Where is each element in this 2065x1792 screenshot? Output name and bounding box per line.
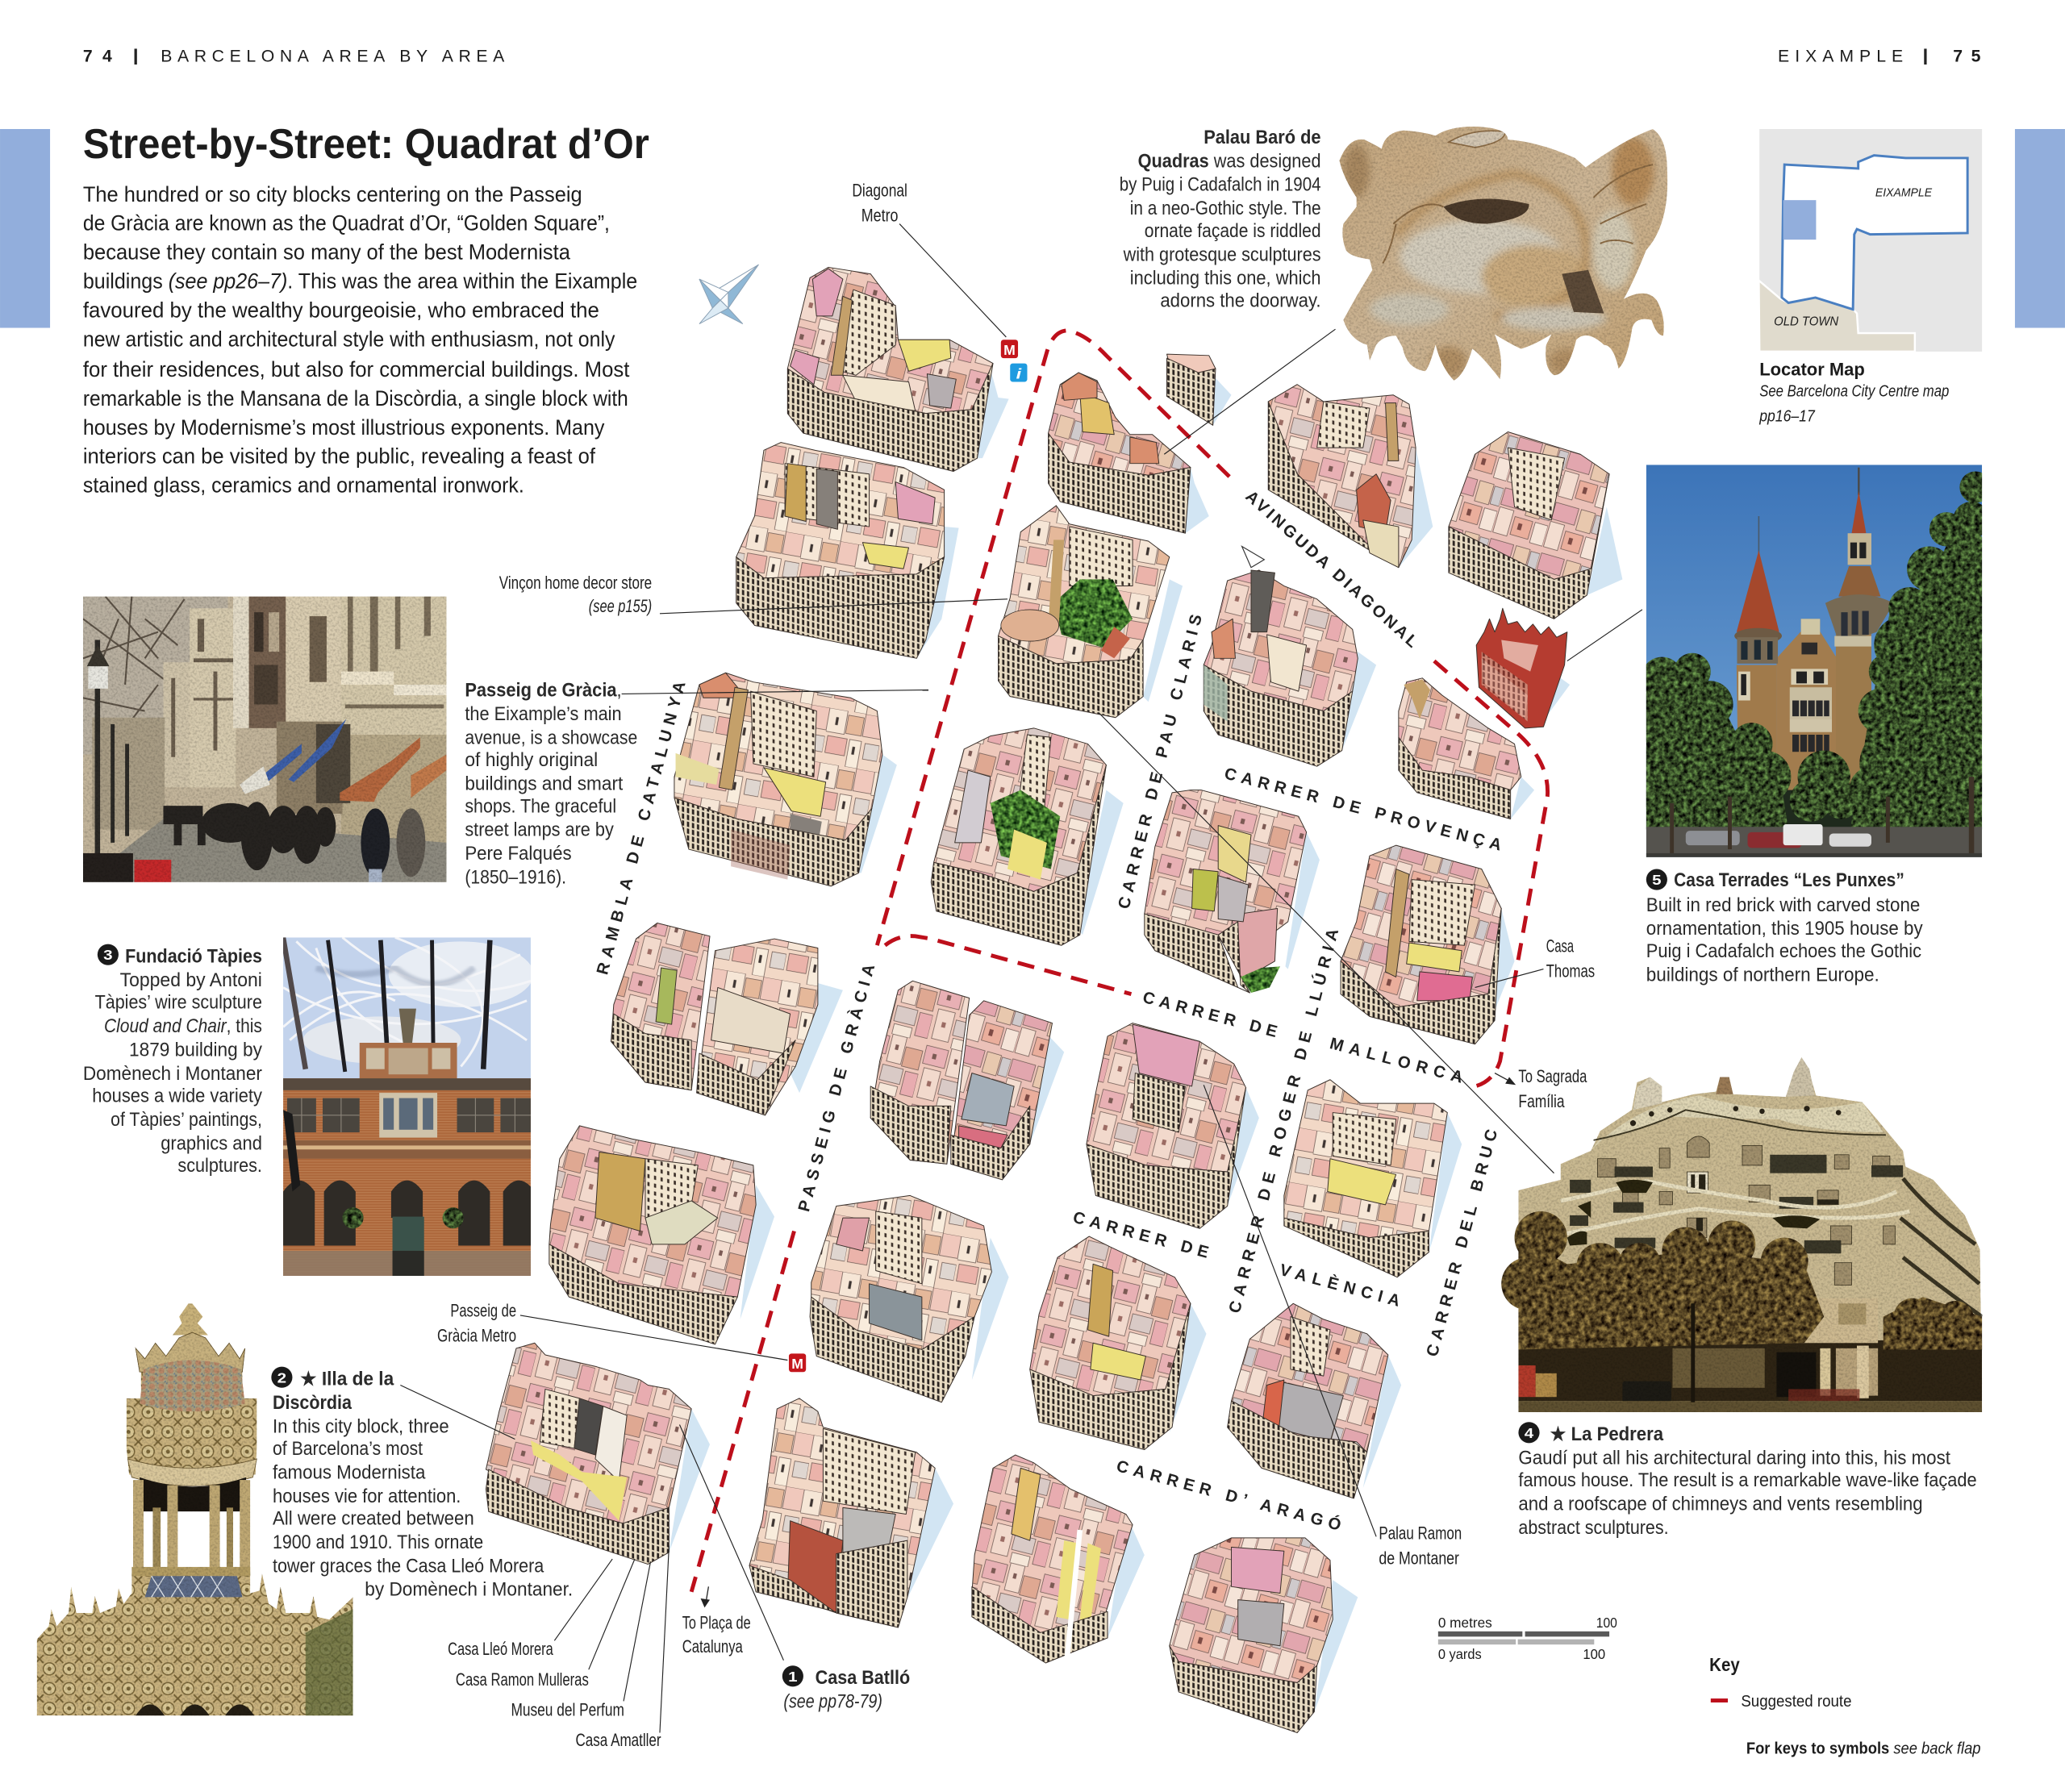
running header right: 75 [1953,48,1981,66]
block: Carrer de Provenca south [1145,790,1320,993]
photo: gargoyle sculpture [1339,126,1668,381]
photo: Casa Lleo Morera tower [37,1303,353,1715]
icon: compass star [699,265,758,324]
suggested route lower [691,1231,794,1592]
block: north-west 2 [736,443,959,658]
map label: Diagonal Metro: Metro [861,205,898,225]
callout: Passeig de Gracia: Passeig de Gràcia, [465,681,622,702]
block: Arago south [1170,1538,1358,1733]
locator map caption [1758,359,1949,425]
intro text: because they contain so many of the best Modernista [83,240,570,265]
callout: La Pedrera: Gaudí put all his architectural daring into this, his most [1518,1448,1950,1469]
key: Key [1709,1654,1740,1675]
callout: Illa de la Discordia: ★ Illa de la [300,1369,394,1390]
icon: tourist information [1010,364,1027,381]
locator map: OLD TOWN [1774,315,1839,328]
callout: Palau Baro de Quadras: Quadras was designed [1138,151,1321,172]
key [1709,1654,1851,1711]
street labels: CARRER DEL BRUC [1424,1127,1501,1359]
locator map caption: See Barcelona City Centre map [1759,382,1949,400]
callout: Casa Batllo [782,1665,910,1713]
map labels: Illa de la Discordia houses [448,1639,661,1750]
street labels: AVINGUDA DIAGONAL [1242,487,1421,652]
callout: Fundacio Tapies [83,944,262,1177]
map label: Casa Thomas [1546,936,1595,981]
callout: Fundacio Tapies: houses a wide variety [92,1086,262,1107]
callout: La Pedrera: 4 [1525,1425,1533,1441]
intro text: The hundred or so city blocks centering on the Passeig [83,182,582,206]
callout: Passeig de Gracia: Pere Falqués [465,844,572,865]
callout: Palau Baro de Quadras [1120,127,1321,311]
title: Street-by-Street: Quadrat d’Or [83,121,649,168]
intro text: new artistic and architectural style with enthusiasm, not only [83,327,615,351]
callout: Illa de la Discordia: of Barcelona’s most [273,1439,423,1460]
callout: Casa Batllo: Casa Batlló [816,1668,910,1689]
callout: Illa de la Discordia: Discòrdia [273,1393,353,1414]
block: Diagonal east [1268,385,1433,568]
leader lines [400,224,1642,1733]
street labels: CARRER DE PAU CLARIS [1116,613,1206,911]
callout: Palau Baro de Quadras: by Puig i Cadafalch in 1904 [1120,175,1321,196]
block: small triangle [1167,354,1232,425]
callout: Palau Baro de Quadras: Palau Baró de [1204,127,1321,148]
map label: Vincon [499,573,652,616]
street labels: CARRER DE [1071,1209,1211,1262]
running header right [1778,48,1981,66]
running header left: BARCELONA AREA BY AREA [161,48,505,66]
callout: La Pedrera [1518,1422,1977,1539]
suggested route middle [885,936,1131,994]
icon: Diagonal metro: M [1003,342,1016,358]
photo: Fundacio Tapies building [283,937,535,1276]
footnote: keys to symbols: For keys to symbols see back flap [1746,1740,1980,1758]
intro text: stained glass, ceramics and ornamental ironwork. [83,473,524,498]
street labels: CARRER DE [1141,989,1279,1041]
key: Suggested route [1741,1693,1851,1711]
callout: Palau Baro de Quadras: including this one, which [1130,269,1321,290]
map label: To Placa de Catalunya: Catalunya [682,1636,743,1657]
callout: Palau Baro de Quadras: adorns the doorway. [1160,290,1321,311]
photo: Casa Terrades [1628,465,1996,857]
callout: Palau Baro de Quadras: ornate façade is riddled [1145,221,1321,242]
running header right: EIXAMPLE [1778,48,1903,66]
map label: Palau Ramon de Montaner: Palau Ramon [1379,1523,1462,1544]
text: Casa Terrades: Built in red brick with carved stone [1646,895,1920,916]
callout: Passeig de Gracia: the Eixample’s main [465,704,622,725]
block: Rambla mid pair [611,923,843,1115]
suggested route right [1434,661,1548,1088]
callout: Illa de la Discordia: by Domènech i Montaner. [365,1580,573,1601]
callout: Illa de la Discordia: houses vie for attention. [273,1486,461,1507]
street labels: CARRER D’ ARAGÓ [1115,1456,1343,1535]
map label: Casa Thomas: Casa [1546,936,1575,956]
scale bar [1438,1615,1617,1662]
street labels: CARRER DE ROGER DE LLÚRIA [1224,927,1342,1315]
photo: La Pedrera [1501,1057,1982,1412]
text: Casa Terrades [1646,869,1923,986]
text: Casa Terrades: ornamentation, this 1905 house by [1646,919,1923,940]
street labels: VALÈNCIA [1278,1261,1402,1311]
callout: Passeig de Gracia: of highly original [465,750,598,771]
left side colour tab [0,129,50,328]
callout: Palau Baro de Quadras: in a neo-Gothic style. The [1130,198,1321,219]
callout: La Pedrera: and a roofscape of chimneys and vents resembling [1518,1494,1923,1515]
block: Mallorca south [1087,1023,1259,1228]
icon: Passeig de Gracia metro [789,1353,806,1372]
map label: Vincon: (see p155) [589,596,652,616]
block: Passeig south [810,1195,1009,1402]
block: Casa Thomas [1341,845,1515,1044]
callout: Illa de la Discordia: 1900 and 1910. This ornate [273,1532,483,1553]
map labels: Illa de la Discordia houses: Casa Amatller [575,1730,661,1750]
map label: To Placa de Catalunya: To Plaça de [682,1613,751,1633]
callout: Illa de la Discordia: tower graces the Casa Lleó Morera [273,1556,544,1577]
text: Casa Terrades: 5 [1652,872,1662,888]
callout: Illa de la Discordia: In this city block, three [273,1416,449,1437]
callout: Fundacio Tapies: 3 [103,947,113,963]
callout: Fundacio Tapies: graphics and [161,1133,262,1154]
callout: Passeig de Gracia: buildings and smart [465,774,624,795]
intro text: buildings (see pp26–7). This was the area within the Eixample [83,269,637,294]
callout: Illa de la Discordia: All were created between [273,1509,474,1530]
scale bar: 100 [1583,1646,1605,1662]
callout: Fundacio Tapies: 1879 building by [129,1040,262,1061]
block: Arago west [749,1398,953,1627]
callout: Fundacio Tapies: Cloud and Chair, this [104,1016,262,1037]
map label: Vincon: Vinçon home decor store [499,573,652,593]
intro text: for their residences, but also for commercial buildings. Most [83,357,630,381]
block: Arago centre split [972,1455,1145,1663]
map label: Palau Ramon de Montaner [1379,1523,1462,1569]
map label: Casa Thomas: Thomas [1546,961,1595,981]
icon: small triangle marker [1242,547,1264,568]
locator map caption: pp16–17 [1758,407,1815,425]
arrow: to Placa de Catalunya [701,1586,710,1607]
text: Casa Terrades: Puig i Cadafalch echoes the Gothic [1646,941,1921,962]
locator map caption: Locator Map [1759,359,1865,379]
callout: La Pedrera: famous house. The result is a remarkable wave-like façade [1518,1470,1977,1491]
callout: Illa de la Discordia: famous Modernista [273,1462,426,1483]
block: Rambla south large [549,1126,774,1344]
callout: La Pedrera: abstract sculptures. [1518,1518,1669,1539]
arrow: to Sagrada Familia [1495,1073,1516,1085]
callout: Fundacio Tapies: Fundació Tàpies [125,946,262,967]
icon: small Casa Terrades building [1476,608,1570,728]
block: Valencia centre [1030,1236,1207,1450]
icon: tourist information: i [1016,365,1022,381]
block: Pau Claris north (Palau Baro) [1049,373,1209,533]
map label: Passeig de Gracia Metro: Passeig de [450,1301,516,1321]
running header left: 74 [83,48,112,66]
right side colour tab [2015,129,2065,328]
intro text: remarkable is the Mansana de la Discòrdia, a single block with [83,386,628,410]
map label: To Placa de Catalunya [682,1613,751,1657]
text: Casa Terrades: Casa Terrades “Les Punxes” [1674,870,1904,891]
intro text: de Gràcia are known as the Quadrat d’Or, “Golden Square”, [83,211,610,235]
callout: Fundacio Tapies: Topped by Antoni [120,970,262,991]
block: Palau Ramon de Montaner [1228,1303,1401,1498]
suggested route upper [877,331,1229,945]
intro text [83,182,637,498]
scale bar: 100 [1596,1615,1617,1631]
street labels: RAMBLA DE CATALUNYA [594,679,690,977]
map label: Palau Ramon de Montaner: de Montaner [1379,1548,1459,1569]
callout: Passeig de Gracia: avenue, is a showcase [465,727,637,748]
street labels [594,487,1504,1535]
callout: Fundacio Tapies: Domènech i Montaner [83,1064,262,1085]
callout: Palau Baro de Quadras: with grotesque sculptures [1123,244,1321,265]
callout: Casa Batllo: (see pp78-79) [783,1692,882,1713]
scale bar: 0 metres [1438,1615,1492,1631]
map label: Passeig de Gracia Metro [437,1301,516,1346]
callout: La Pedrera: ★ La Pedrera [1550,1424,1664,1445]
block: between Roger and Bruc [1284,1080,1462,1277]
intro text: favoured by the wealthy bourgeoisie, who embraced the [83,298,599,322]
photo: Passeig de Gracia street [83,597,446,882]
map labels: Illa de la Discordia houses: Casa Lleó Morera [448,1639,553,1659]
block: east of Pau Claris [1204,570,1376,766]
locator map [1758,129,1982,352]
callout: Casa Batllo: 1 [788,1669,798,1685]
map labels: Illa de la Discordia houses: Museu del Perfum [511,1699,624,1719]
block: centre with garden [931,728,1124,945]
callout: Fundacio Tapies: sculptures. [177,1156,262,1177]
block: Illa de la Discordia [486,1343,710,1565]
callout: Illa de la Discordia [271,1367,573,1601]
callout: Fundacio Tapies: Tàpies’ wire sculpture [95,993,262,1014]
street labels: MALLORCA [1328,1035,1465,1087]
block: Rambla north [674,673,897,886]
callout: Passeig de Gracia [465,681,637,888]
callout: Passeig de Gracia: (1850–1916). [465,867,566,888]
map label: To Sagrada Familia: To Sagrada [1518,1066,1587,1086]
block: Provenca east [1399,678,1534,819]
map label: Diagonal Metro: Diagonal [852,180,907,200]
callout: Illa de la Discordia: 2 [277,1369,286,1386]
callout: Passeig de Gracia: shops. The graceful [465,796,616,817]
street labels: PASSEIG DE GRÀCIA [795,962,878,1214]
callout: Passeig de Gracia: street lamps are by [465,820,614,841]
intro text: interiors can be visited by the public, revealing a feast of [83,444,595,469]
block: Diagonal north-west [787,267,1009,471]
locator map: EIXAMPLE [1875,186,1932,199]
scale bar: 0 yards [1438,1646,1482,1662]
block: Passeig mid pair [870,981,1064,1180]
map label: To Sagrada Familia: Família [1518,1091,1565,1111]
intro text: houses by Modernisme’s most illustrious exponents. Many [83,415,605,440]
icon: Diagonal metro [1001,340,1018,358]
street labels: CARRER DE PROVENÇA [1222,765,1504,855]
callout: Fundacio Tapies: of Tàpies’ paintings, [111,1110,262,1131]
text: Casa Terrades: buildings of northern Europe. [1646,965,1879,986]
map label: To Sagrada Familia [1518,1066,1587,1111]
block: Pau Claris with garden [999,506,1183,718]
map label: Diagonal Metro [852,180,907,225]
icon: Passeig de Gracia metro: M [791,1356,803,1372]
block: far north-east [1449,432,1622,619]
map labels: Illa de la Discordia houses: Casa Ramon Mulleras [456,1669,589,1690]
map label: Passeig de Gracia Metro: Gràcia Metro [437,1326,516,1346]
map blocks [486,267,1622,1733]
